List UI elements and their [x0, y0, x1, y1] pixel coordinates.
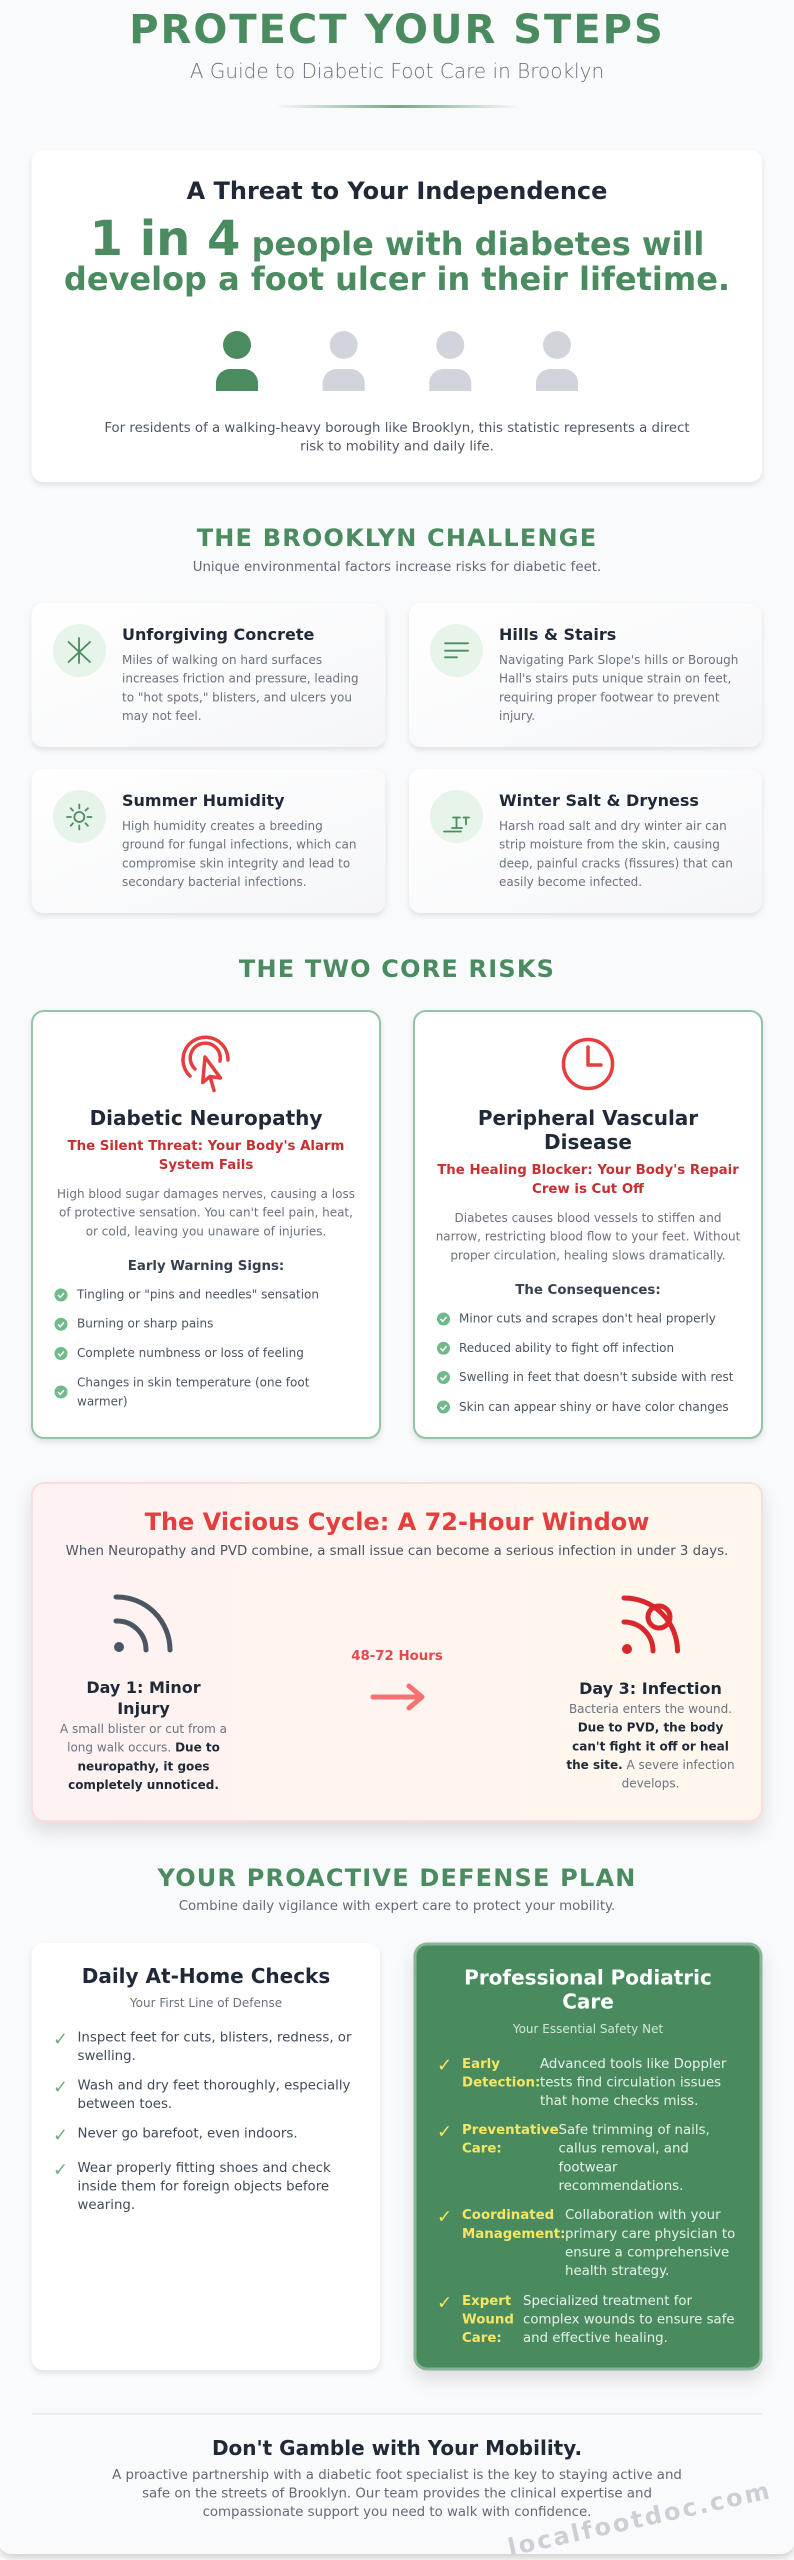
section heading: Brooklyn challenge: THE BROOKLYN CHALLENGE — [197, 524, 597, 552]
icon: minor injury — [114, 1597, 170, 1652]
risk heading — [478, 1106, 698, 1154]
checklist: Never go barefoot, even indoors. — [78, 2126, 298, 2142]
card text: Hall's stairs puts unique strain on feet, — [499, 672, 731, 686]
card heading: Professional Podiatric — [464, 1966, 712, 1990]
care list — [437, 2055, 735, 2346]
cycle subheading: When Neuropathy and PVD combine, a small issue can become a serious infection in under 3 days. — [66, 1544, 728, 1559]
checklist: ✓ — [53, 2077, 68, 2098]
care list: Safe trimming of nails, — [558, 2123, 710, 2138]
risk description: narrow, restricting blood flow to your feet. Without — [436, 1230, 741, 1244]
warning list: Changes in skin temperature (one foot — [77, 1376, 310, 1390]
day 3 text: Day 3: Infection — [579, 1679, 722, 1698]
time label: 48-72 Hours — [351, 1649, 443, 1664]
care list: Detection: — [462, 2076, 540, 2090]
icon: nerve cursor — [183, 1037, 228, 1090]
consequences list — [437, 1312, 734, 1414]
card text: increases friction and pressure, leading — [122, 672, 359, 686]
footer text: safe on the streets of Brooklyn. Our team provides the clinical expertise and — [142, 2486, 652, 2502]
risk tagline: System Fails — [159, 1158, 253, 1173]
checklist: between toes. — [78, 2097, 172, 2112]
card text: ground for fungal infections, which can — [122, 838, 356, 852]
card text: requiring proper footwear to prevent — [499, 690, 720, 704]
care list: tests find circulation issues — [540, 2076, 721, 2090]
risk tagline — [437, 1163, 739, 1197]
risk tagline: The Healing Blocker: Your Body's Repair — [437, 1163, 739, 1178]
risk description — [436, 1211, 741, 1262]
card text: Hills & Stairs — [499, 625, 616, 644]
checklist: Wear properly fitting shoes and check — [78, 2161, 331, 2176]
card text: Unforgiving Concrete — [122, 625, 314, 644]
day 3 text: Due to PVD, the body — [578, 1721, 723, 1735]
section heading: defense plan: YOUR PROACTIVE DEFENSE PLAN — [156, 1864, 637, 1892]
statistic note — [104, 421, 690, 454]
risk heading: Diabetic Neuropathy — [90, 1106, 322, 1130]
panel: diabetic neuropathy — [32, 1011, 380, 1438]
consequences heading: The Consequences: — [515, 1283, 661, 1298]
checklist: Inspect feet for cuts, blisters, redness, or — [78, 2030, 352, 2046]
footer text: compassionate support you need to walk with confidence. — [203, 2505, 591, 2520]
day 3 text: Bacteria enters the wound. — [569, 1702, 732, 1716]
checklist — [53, 2029, 352, 2213]
consequences list: Swelling in feet that doesn't subside with rest — [459, 1370, 734, 1384]
risk heading: Disease — [544, 1130, 632, 1154]
day 1 text: Injury — [117, 1699, 170, 1718]
checklist: ✓ — [53, 2160, 68, 2180]
card text: to "hot spots," blisters, and ulcers you — [122, 690, 352, 704]
cycle heading: The Vicious Cycle: A 72-Hour Window — [145, 1508, 649, 1536]
day 1 text: long walk occurs. Due to — [67, 1741, 220, 1755]
checklist: swelling. — [78, 2049, 136, 2064]
risk tagline — [68, 1139, 344, 1173]
card text: easily become infected. — [499, 875, 642, 889]
day 1 text: A small blister or cut from a — [60, 1722, 227, 1736]
checklist: wearing. — [78, 2198, 135, 2213]
day 1 text: Day 1: Minor — [86, 1678, 201, 1697]
panel: unforgiving concrete — [32, 603, 386, 747]
day 3 text: develops. — [622, 1777, 679, 1791]
consequences list: Skin can appear shiny or have color changes — [459, 1400, 729, 1414]
icon: sun — [53, 790, 106, 843]
statistic note: risk to mobility and daily life. — [300, 440, 494, 454]
warning list: warmer) — [77, 1394, 128, 1408]
risk description: High blood sugar damages nerves, causing a loss — [57, 1187, 355, 1201]
section heading: Brooklyn challenge — [193, 524, 601, 575]
card text: strip moisture from the skin, causing — [499, 838, 720, 852]
care list: Preventative — [462, 2123, 559, 2138]
subtitle: A Guide to Diabetic Foot Care in Brooklyn — [190, 59, 604, 83]
checklist: ✓ — [53, 2029, 68, 2050]
checklist: Wash and dry feet thoroughly, especially — [78, 2078, 351, 2094]
card heading: Daily At-Home Checks — [82, 1964, 330, 1988]
panel: winter salt — [409, 769, 762, 913]
risk tagline: The Silent Threat: Your Body's Alarm — [68, 1139, 344, 1154]
section heading: defense plan — [156, 1864, 637, 1914]
card text: Winter Salt & Dryness — [499, 791, 699, 810]
panel: peripheral vascular disease — [414, 1011, 762, 1438]
care list: complex wounds to ensure safe — [523, 2312, 735, 2328]
card heading — [464, 1966, 712, 2036]
footer — [112, 2436, 682, 2520]
care list: ensure a comprehensive — [565, 2246, 729, 2260]
watermark: localfootdoc.com — [505, 2476, 774, 2560]
card text: compromise skin integrity and lead to — [122, 856, 350, 870]
footer heading: Don't Gamble with Your Mobility. — [212, 2436, 582, 2460]
card text — [499, 625, 738, 723]
panel: hills and stairs — [409, 603, 762, 747]
care list: callus removal, and — [558, 2142, 689, 2156]
care list: that home checks miss. — [540, 2094, 698, 2109]
card text: Navigating Park Slope's hills or Borough — [499, 653, 738, 667]
section heading: two core risks: THE TWO CORE RISKS — [239, 955, 555, 983]
risk description: of protective sensation. You can't feel pain, heat, — [59, 1206, 353, 1220]
statistic headline: 1 in 4 people with diabetes will — [90, 211, 704, 267]
card text: may not feel. — [122, 709, 202, 723]
panel: daily at-home checks — [32, 1943, 380, 2370]
statistic headline: develop a foot ulcer in their lifetime. — [64, 260, 730, 298]
icon: hills — [430, 624, 483, 677]
statistic note: For residents of a walking-heavy borough like Brooklyn, this statistic represents a direct — [104, 421, 690, 436]
care list: Management: — [462, 2227, 565, 2242]
care list: Care: — [462, 2142, 502, 2156]
early warning heading: Early Warning Signs: — [128, 1259, 284, 1274]
care list: Wound — [462, 2312, 514, 2328]
risk description — [57, 1187, 355, 1238]
day 1 text: neuropathy, it goes — [77, 1759, 210, 1773]
risk heading: Peripheral Vascular — [478, 1106, 698, 1130]
card text: Miles of walking on hard surfaces — [122, 653, 322, 667]
care list: health strategy. — [565, 2264, 669, 2279]
care list: Coordinated — [462, 2208, 554, 2223]
warning list: Burning or sharp pains — [77, 1317, 213, 1331]
pictogram: 1 of 4 people — [216, 331, 578, 391]
care list: Specialized treatment for — [523, 2294, 693, 2309]
checklist: inside them for foreign objects before — [78, 2180, 329, 2194]
day 1 text — [60, 1678, 227, 1792]
care list: Collaboration with your — [565, 2208, 721, 2223]
footer text: A proactive partnership with a diabetic foot specialist is the key to staying active and — [112, 2468, 682, 2483]
day 3 text — [566, 1679, 735, 1791]
header divider — [275, 105, 520, 108]
care list: ✓ — [437, 2055, 452, 2076]
care list: ✓ — [437, 2206, 452, 2228]
statistic heading: A Threat to Your Independence — [187, 177, 607, 205]
care list: Care: — [462, 2331, 502, 2346]
section heading: Brooklyn challenge: Unique environmental factors increase risks for diabetic feet. — [193, 560, 601, 575]
title: PROTECT YOUR STEPS — [129, 7, 665, 53]
card text: deep, painful cracks (fissures) that can — [499, 856, 733, 870]
card text: Summer Humidity — [122, 791, 285, 810]
card text: injury. — [499, 709, 535, 723]
icon: concrete — [53, 624, 106, 677]
card heading: Your First Line of Defense — [129, 1996, 282, 2010]
panel: vicious cycle — [32, 1483, 762, 1821]
card text: High humidity creates a breeding — [122, 819, 323, 833]
panel: professional podiatric care — [415, 1944, 761, 2369]
risk description: Diabetes causes blood vessels to stiffen and — [455, 1211, 721, 1225]
care list: Advanced tools like Doppler — [540, 2057, 727, 2072]
panel: statistic — [32, 150, 762, 482]
day 1 text: completely unnoticed. — [68, 1778, 219, 1792]
header — [129, 7, 665, 108]
care list: primary care physician to — [565, 2227, 735, 2242]
card text — [122, 791, 356, 889]
card text: secondary bacterial infections. — [122, 875, 307, 889]
risk description: or cold, leaving you unaware of injuries. — [86, 1224, 326, 1238]
section heading: defense plan: Combine daily vigilance with expert care to protect your mobility. — [179, 1899, 615, 1914]
consequences list: Reduced ability to fight off infection — [459, 1341, 674, 1355]
care list: footwear — [558, 2160, 618, 2176]
card text: Harsh road salt and dry winter air can — [499, 819, 727, 833]
care list: Early — [462, 2057, 500, 2072]
care list: Expert — [462, 2294, 512, 2309]
card heading — [82, 1964, 330, 2010]
risk description: proper circulation, healing slows dramatically. — [450, 1248, 726, 1262]
warning list: Complete numbness or loss of feeling — [77, 1346, 304, 1360]
card text — [499, 791, 733, 889]
care list: ✓ — [437, 2122, 452, 2142]
risk tagline: Crew is Cut Off — [532, 1182, 644, 1197]
statistic headline — [64, 211, 730, 298]
panel: summer humidity — [32, 769, 386, 913]
care list: recommendations. — [558, 2179, 683, 2194]
warning list — [54, 1288, 319, 1408]
day 3 text: can't fight it off or heal — [572, 1739, 729, 1753]
icon: infection — [622, 1598, 678, 1654]
warning list: Tingling or "pins and needles" sensation — [76, 1288, 319, 1302]
consequences list: Minor cuts and scrapes don't heal properly — [459, 1312, 716, 1326]
care list: and effective healing. — [523, 2331, 668, 2346]
care list: ✓ — [437, 2292, 452, 2314]
arrow — [373, 1686, 422, 1708]
card heading: Care — [562, 1990, 614, 2014]
icon: salt — [430, 790, 483, 843]
checklist: ✓ — [53, 2125, 68, 2146]
icon: clock — [564, 1040, 612, 1088]
day 3 text: the site. A severe infection — [566, 1758, 735, 1772]
card heading: Your Essential Safety Net — [512, 2022, 663, 2036]
footer text — [112, 2468, 682, 2520]
card text — [122, 625, 359, 723]
